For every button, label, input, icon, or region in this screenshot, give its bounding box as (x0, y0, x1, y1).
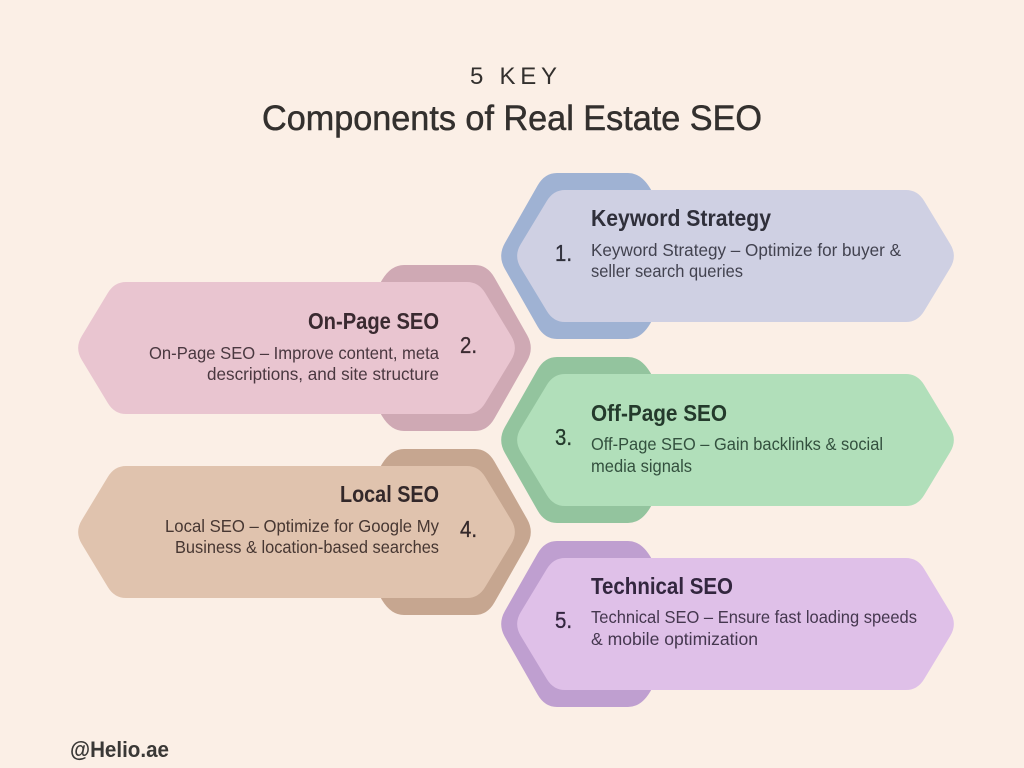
heading: Keyword Strategy (591, 205, 771, 231)
number: 2. (460, 332, 477, 358)
description (591, 240, 901, 281)
panel 2: On-Page SEO (78, 265, 531, 431)
description: On-Page SEO – Improve content, meta (149, 343, 439, 363)
hexagon backing (372, 265, 531, 431)
panel 4: Local SEO (78, 449, 531, 615)
panel 5: Technical SEO (501, 541, 954, 707)
heading: On-Page SEO (308, 308, 439, 334)
hexagon front (517, 190, 954, 322)
description: Technical SEO – Ensure fast loading speeds (591, 607, 917, 627)
description: descriptions, and site structure (207, 364, 439, 384)
credit: @Helio.ae (70, 737, 169, 762)
description: media signals (591, 456, 692, 476)
description: seller search queries (591, 261, 743, 281)
title: Components of Real Estate SEO (262, 99, 762, 138)
hexagon front (517, 374, 954, 506)
hexagon front (78, 466, 515, 598)
number: 3. (555, 424, 572, 450)
number: 5. (555, 607, 572, 633)
description (165, 516, 439, 557)
number: 1. (555, 240, 572, 266)
description (149, 343, 439, 384)
panel 3: Off-Page SEO (501, 357, 954, 523)
hexagon front (78, 282, 515, 414)
description: Keyword Strategy – Optimize for buyer & (591, 240, 901, 260)
description: Off-Page SEO – Gain backlinks & social (591, 434, 883, 454)
number: 4. (460, 516, 477, 542)
hexagon backing (501, 541, 660, 707)
heading: Off-Page SEO (591, 400, 727, 426)
panel 1: Keyword Strategy (501, 173, 954, 339)
heading: Technical SEO (591, 573, 733, 599)
heading: Local SEO (340, 481, 439, 507)
description (591, 434, 883, 476)
description: Local SEO – Optimize for Google My (165, 516, 439, 536)
hexagon front (517, 558, 954, 690)
description: & mobile optimization (591, 629, 758, 649)
eyebrow: 5 KEY: 5 KEY (470, 63, 557, 90)
description (591, 607, 917, 649)
hexagon backing (372, 449, 531, 615)
hexagon backing (501, 173, 660, 339)
description: Business & location-based searches (175, 537, 439, 557)
hexagon backing (501, 357, 660, 523)
